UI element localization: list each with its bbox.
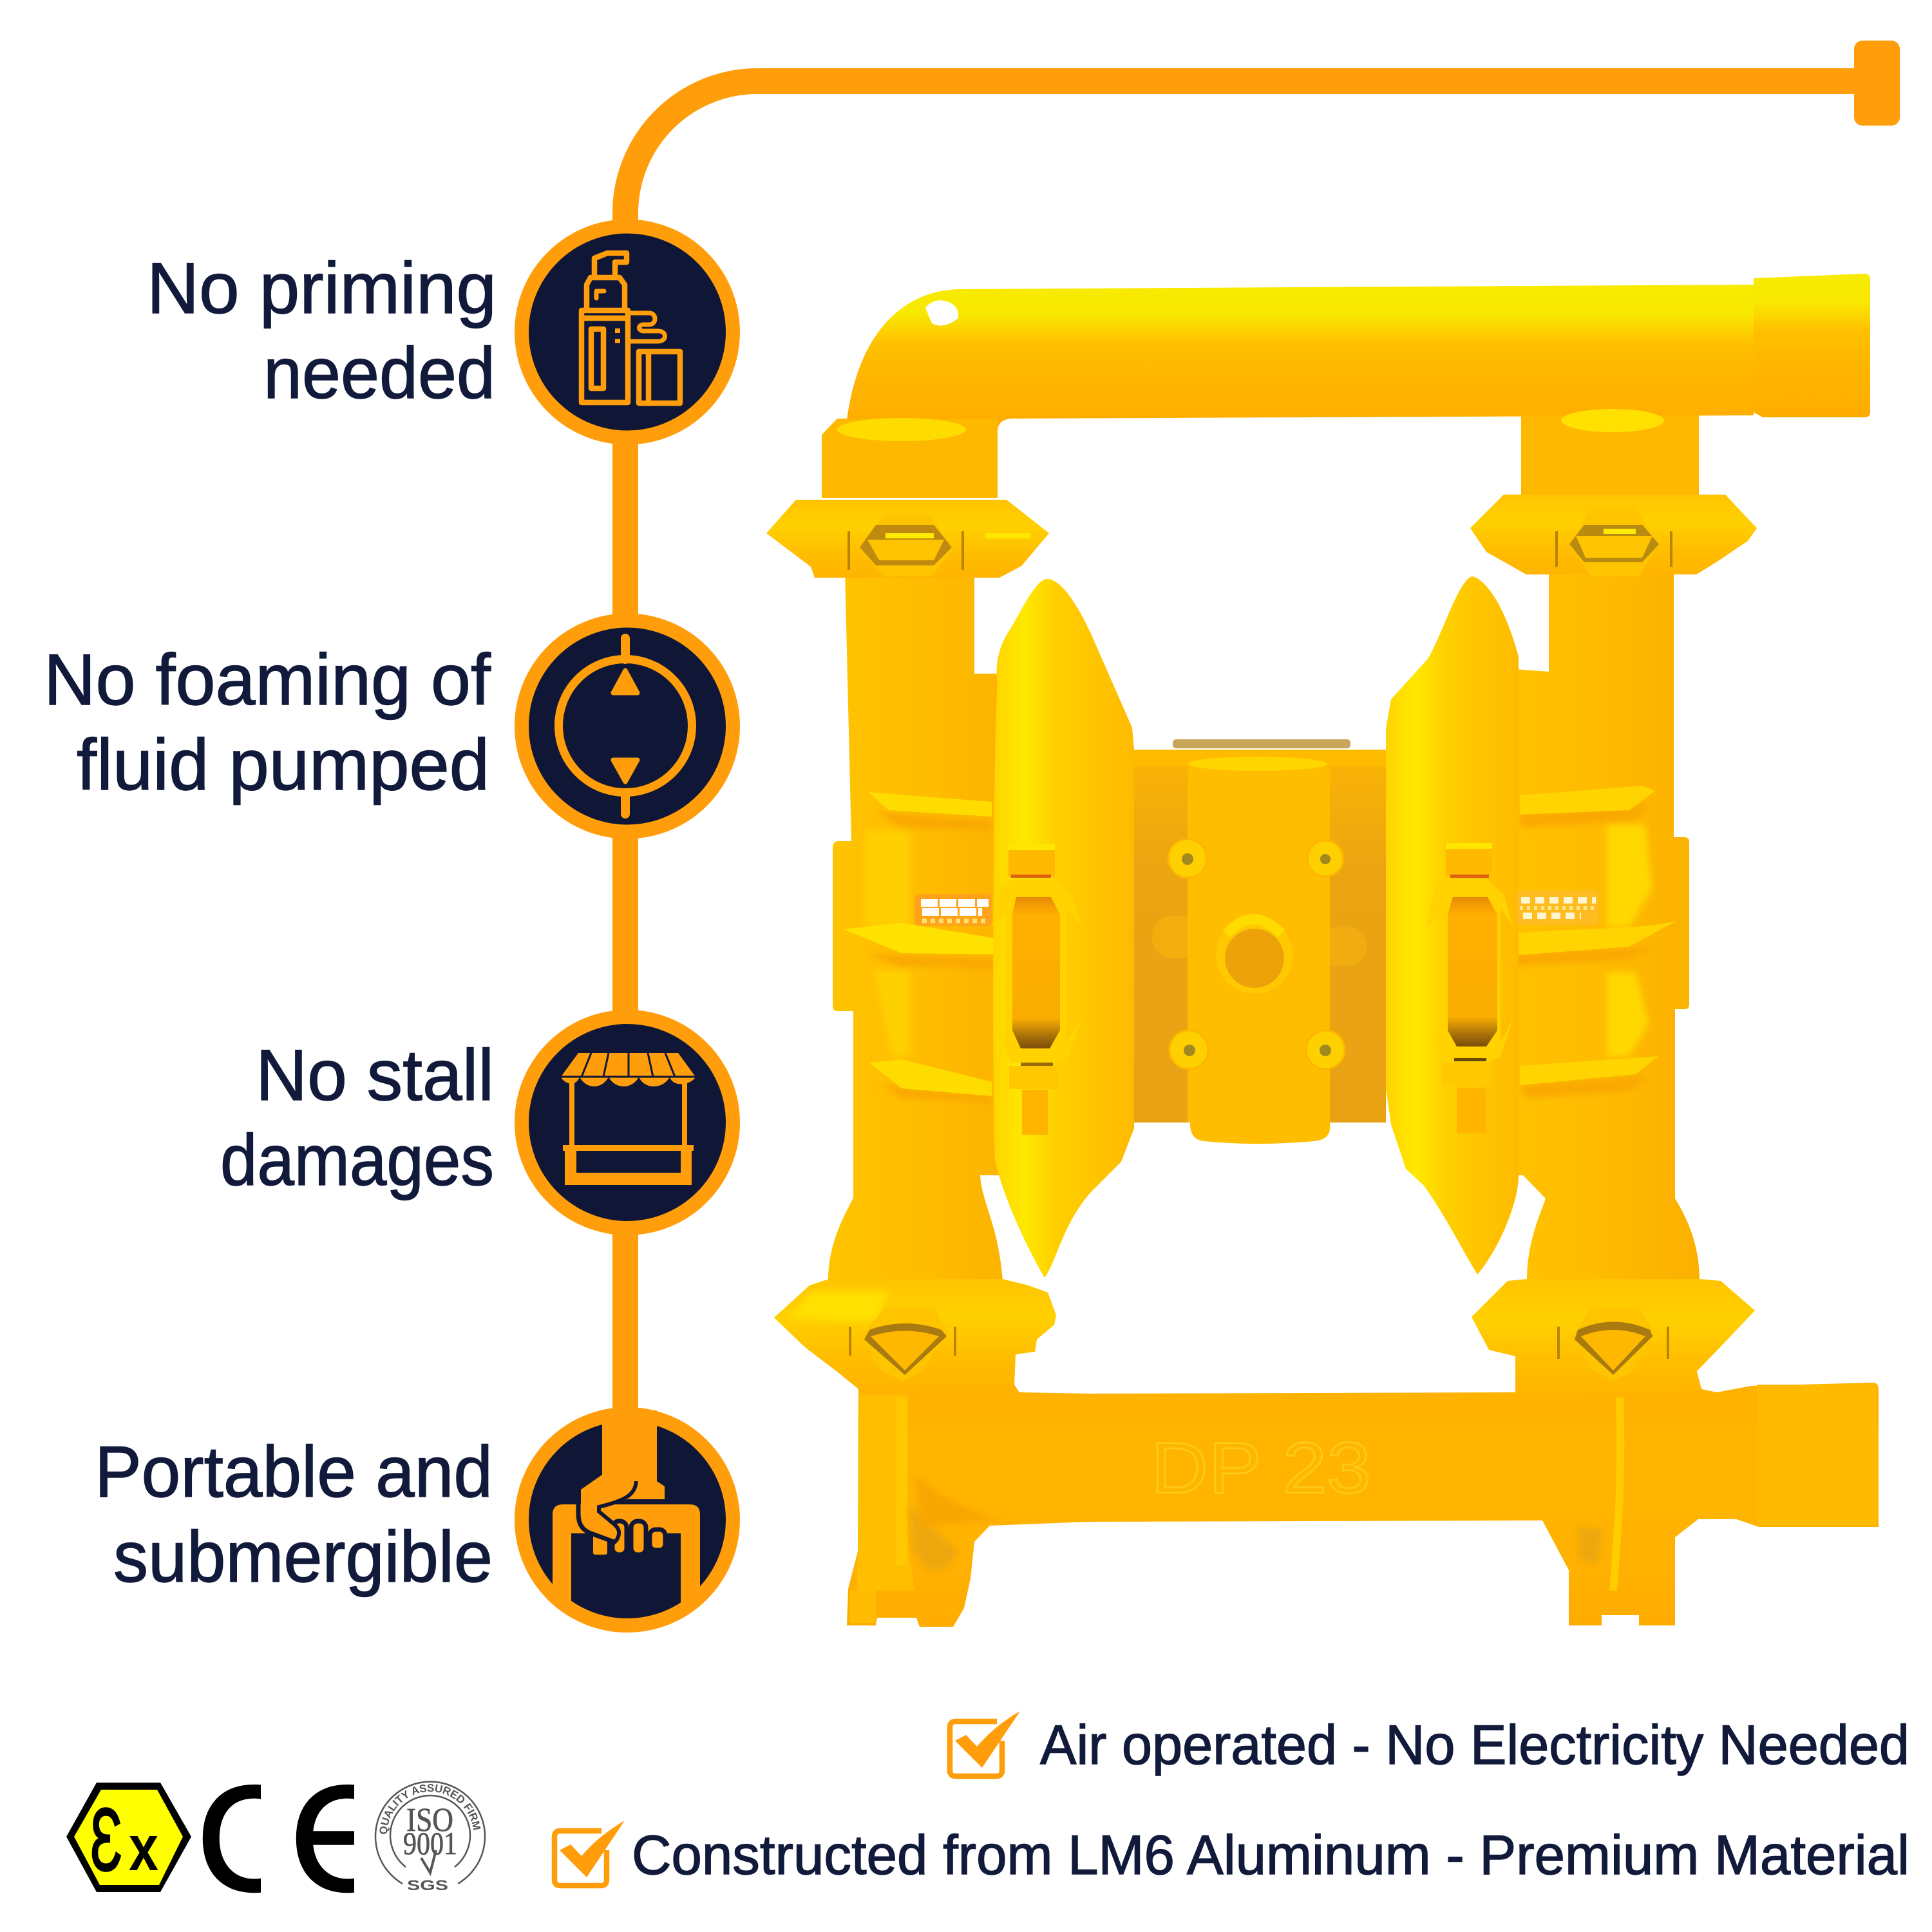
heading: no stall damages: No stall [256,1035,494,1115]
pump: upper left neck [822,419,998,498]
pump: lower right clamp [1472,1279,1755,1397]
pump: upper left clamp [766,500,1049,578]
text: air operated: Air operated - No Electricity Needed [1040,1714,1909,1776]
heading: no stall damages: damages [220,1120,494,1200]
certification: Ex mark [66,1783,191,1892]
certification: ISO 9001 seal [375,1781,486,1893]
pump: lower left clamp [774,1279,1056,1389]
icon: check box [554,1821,625,1886]
pump: centre cylinder with ports [1168,757,1345,1144]
icon: check box [950,1711,1020,1776]
pump: right bolt and slot [1426,843,1513,1133]
certification: CE mark: C [196,1756,305,1922]
pump: chamber ribs and panels [844,786,1676,1103]
pump: right column and chamber [1481,570,1700,1281]
heading: no foaming of fluid pumped: No foaming of [44,639,491,720]
certification: ISO 9001 seal: QUALITY ASSURED FIRM [379,1784,480,1834]
icon: hand holding case [522,1410,733,1629]
pump: right diaphragm [1386,576,1519,1274]
icon: circle with arrows [522,621,733,832]
checklist item: constructed from LM6 aluminum [554,1821,1909,1886]
pump: lower manifold with feet [847,1365,1879,1627]
certification: CE mark [202,1785,354,1893]
pump: left bolt and slot [992,844,1082,1135]
pump: highlight on elbow [925,300,958,326]
lettering: DP 23: DP 23 [1151,1428,1371,1508]
pump: top pipe and elbow [846,285,1754,431]
pump: upper right neck [1521,415,1699,499]
heading: no foaming of fluid pumped: fluid pumped [77,724,489,805]
pump: left column and chamber [828,570,1030,1281]
feature: portable and submergible [95,1410,733,1629]
feature: no stall damages [220,1017,733,1228]
pump: outlet collar [1754,274,1870,417]
pump: left diaphragm [993,579,1134,1278]
certification: ISO 9001 seal: ISO [406,1802,453,1839]
pump illustration [766,274,1879,1627]
feature: no priming needed [147,227,733,438]
pump: centre block [1134,739,1386,1122]
pump: manifold shading and lettering [850,1385,1876,1623]
heading: portable and submergible: submergible [113,1517,493,1597]
pump: glints [914,890,1599,926]
text: constructed from LM6 aluminum: Constructed from LM6 Aluminum - Premium Material [632,1824,1909,1886]
heading: no priming needed: needed [263,333,495,413]
certification: CE mark: Є [290,1756,397,1922]
feature: no foaming of fluid pumped [44,621,733,832]
icon: market stall [522,1017,733,1228]
certification: Ex mark: x [129,1812,158,1884]
pump: upper right clamp [1470,495,1757,576]
pump: neck highlights [837,409,1664,441]
certification: ISO 9001 seal: SGS [407,1877,448,1893]
certification: ISO 9001 seal: 9001 [403,1825,457,1861]
heading: portable and submergible: Portable and [95,1432,493,1512]
checklist item: air operated [950,1711,1909,1776]
certification: Ex mark: Ɛ [90,1790,122,1889]
heading: no priming needed: No priming [147,248,497,328]
icon: pump bottle [522,227,733,438]
connector line with end cap [625,41,1900,1417]
